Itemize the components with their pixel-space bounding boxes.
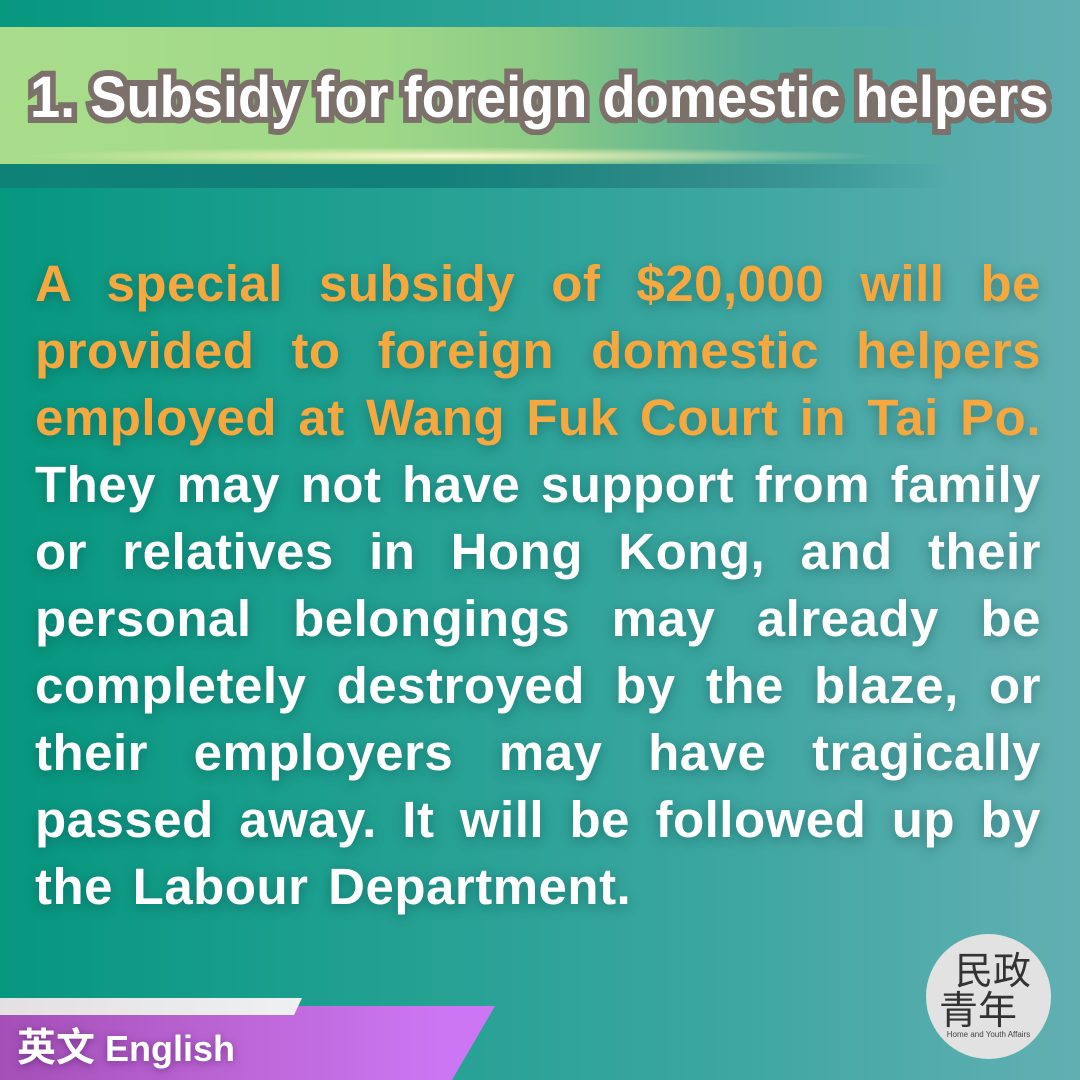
highlighted orange text [33, 255, 1042, 452]
white explanatory text: completely destroyed by the blaze, or [35, 657, 1041, 714]
banner dark shadow band [0, 164, 1080, 188]
tag label: 英文 English [17, 1027, 235, 1070]
white tag strip [0, 998, 302, 1015]
highlighted orange text: provided to foreign domestic helpers [35, 322, 1041, 379]
white explanatory text: passed away. It will be followed up by [35, 791, 1041, 848]
white explanatory text: the Labour Department. [35, 858, 631, 915]
white explanatory text: personal belongings may already be [35, 590, 1041, 647]
logo badge [926, 934, 1051, 1059]
title: 1. Subsidy for foreign domestic helpers [30, 65, 1049, 130]
highlighted orange text: employed at Wang Fuk Court in Tai Po. [35, 389, 1041, 446]
body text [33, 255, 1042, 918]
white explanatory text: their employers may have tragically [35, 724, 1041, 781]
highlighted orange text: A special subsidy of $20,000 will be [35, 255, 1041, 312]
banner light streak [30, 147, 890, 165]
header banner [0, 27, 888, 188]
logo characters lower: 青年 [939, 980, 1017, 1036]
white explanatory text: or relatives in Hong Kong, and their [35, 523, 1041, 580]
white explanatory text [33, 456, 1042, 918]
banner green band [0, 27, 1080, 164]
logo caption: Home and Youth Affairs [947, 1030, 1030, 1039]
purple tag [0, 1006, 495, 1080]
language tag [0, 998, 495, 1080]
logo characters: 民政 [955, 940, 1031, 995]
white explanatory text: They may not have support from family [35, 456, 1041, 513]
